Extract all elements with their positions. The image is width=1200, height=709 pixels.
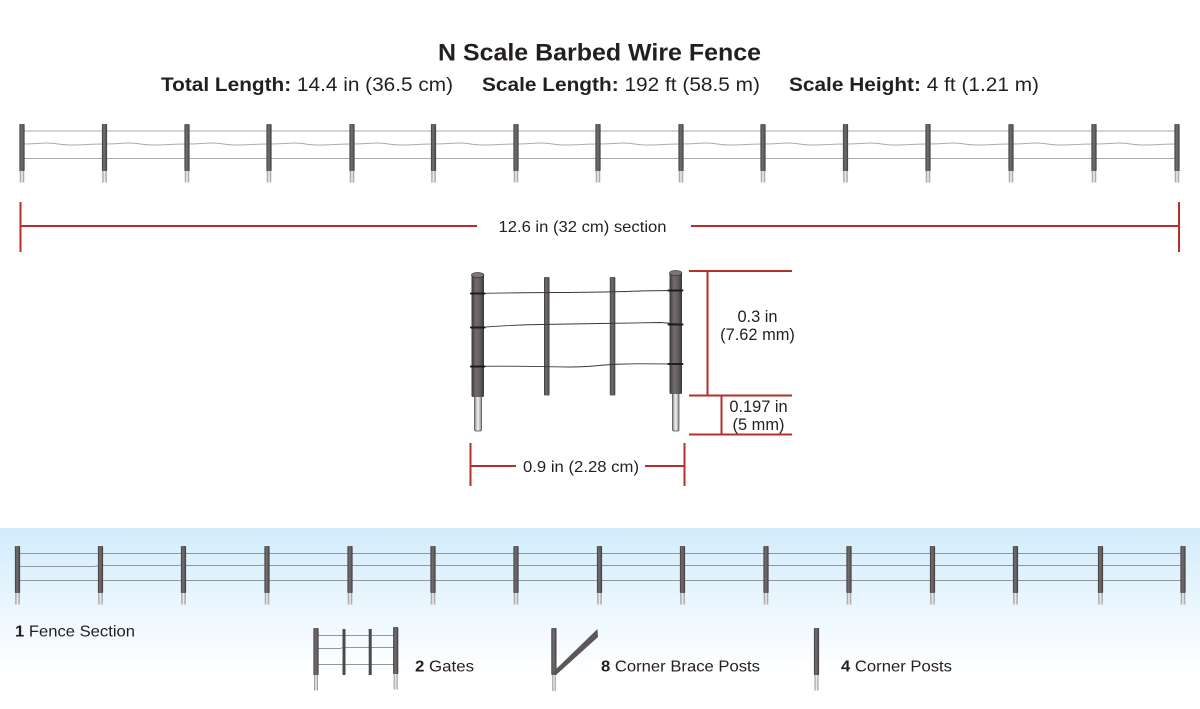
peg left [474,396,482,431]
dimension: post height [689,271,795,434]
wires [470,290,683,367]
spec: total length: Total Length: 14.4 in (36.5 cm) [161,74,453,96]
dimension: section width [470,443,684,486]
title: N Scale Barbed Wire Fence [438,40,761,66]
top fence strip [19,124,1180,182]
background band: sky gradient [0,528,1200,673]
specifications line [161,74,1039,96]
dimension: section length [20,202,1179,252]
middle stay left [544,277,550,396]
peg right [672,393,679,431]
left post [472,272,484,397]
label: 0.3 in: 0.3 in [737,308,778,326]
detail fence section [470,270,683,431]
label: gates: 2 Gates [415,658,474,676]
label: 0.197 in: 0.197 in [729,398,788,416]
middle stay right [610,277,615,396]
icon: corner post [814,628,819,690]
icon: gate [313,627,398,690]
icon: corner brace post [551,628,598,691]
label: fence section: 1 Fence Section [15,624,135,640]
spec: scale height: Scale Height: 4 ft (1.21 m) [789,74,1039,96]
label: 0.9 in: 0.9 in (2.28 cm) [523,459,639,476]
dimension label: section: 12.6 in (32 cm) section [498,219,666,236]
right post [670,270,682,394]
label: corner posts: 4 Corner Posts [841,658,952,676]
label: 0.3 in: (7.62 mm) [720,326,795,344]
label: 0.197 in: (5 mm) [733,416,784,434]
bottom fence section strip [15,546,1186,604]
label: corner brace posts: 8 Corner Brace Posts [601,658,760,676]
spec: scale length: Scale Length: 192 ft (58.5 m) [482,74,760,96]
